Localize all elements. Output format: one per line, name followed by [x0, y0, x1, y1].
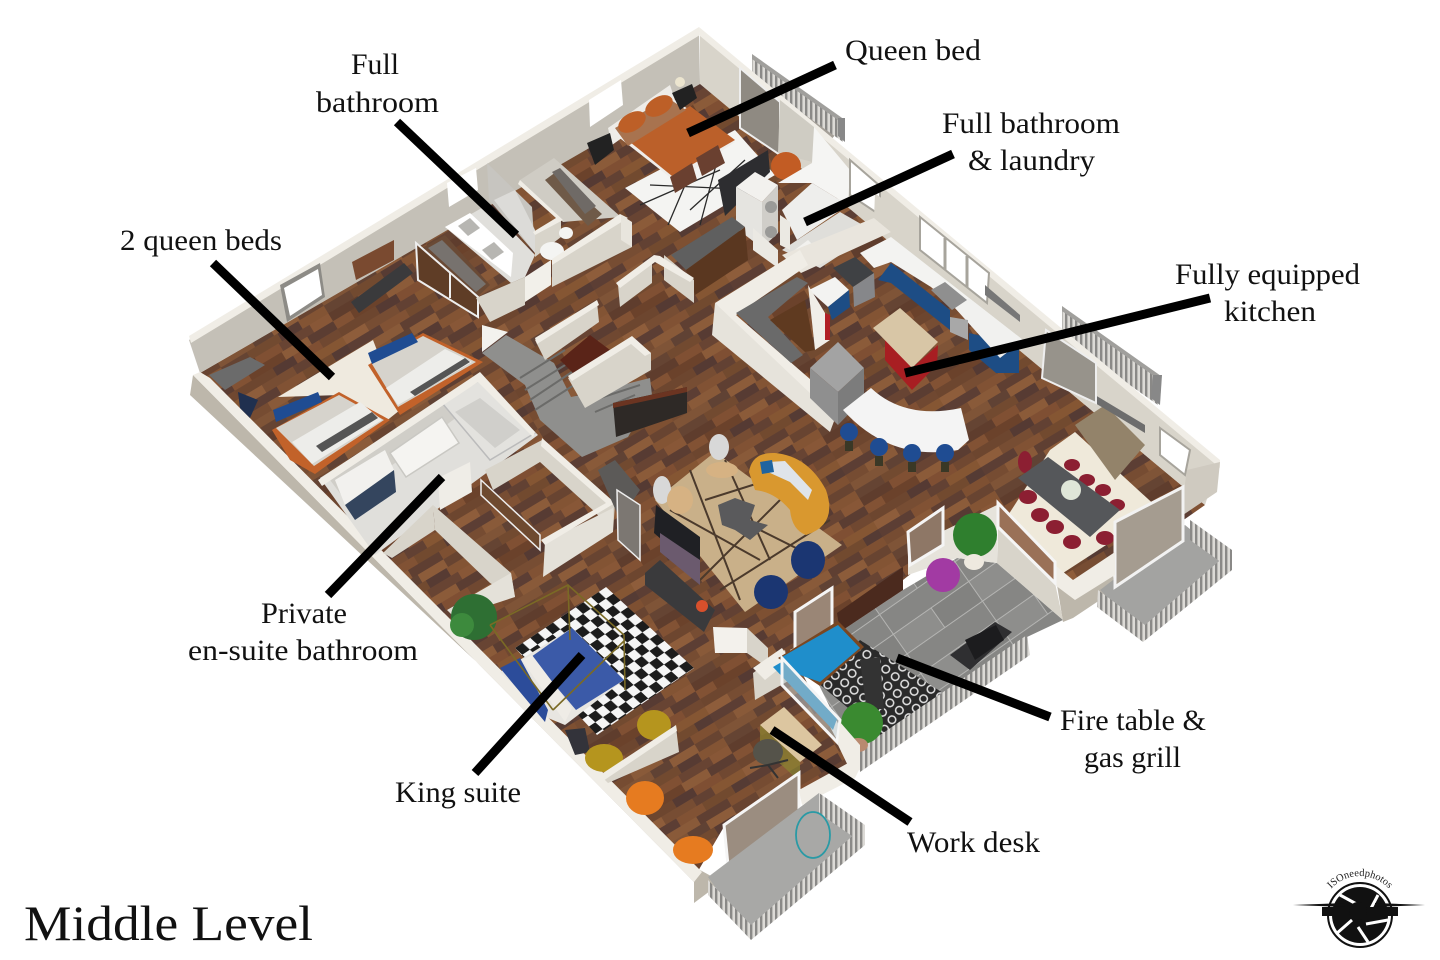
nightstand — [565, 728, 590, 755]
wall top — [782, 218, 891, 273]
closet: hall — [616, 217, 778, 307]
pantry wall — [712, 250, 840, 432]
slider: lower balcony — [724, 773, 799, 865]
door — [713, 627, 747, 653]
sofa frame — [778, 621, 864, 686]
bed A — [368, 333, 483, 415]
room: closets and full bathroom — [416, 158, 632, 322]
shower — [442, 380, 535, 460]
wall: rear left — [189, 27, 700, 373]
sofa cushions — [768, 461, 812, 500]
title: Middle Level — [24, 895, 313, 951]
label: king suite: King suite — [395, 776, 521, 809]
closet A doors — [481, 480, 540, 550]
fire table — [860, 657, 884, 710]
wall: corner stub — [1180, 462, 1220, 517]
room: queen bedroom — [587, 77, 775, 232]
stair railing — [613, 387, 687, 437]
door stub — [780, 215, 790, 250]
slider: queen bedroom — [740, 68, 780, 155]
wall face — [874, 193, 891, 232]
counter — [860, 237, 1023, 348]
shower walls — [778, 127, 850, 205]
wall: front left — [193, 372, 702, 882]
sink — [931, 282, 967, 310]
orange chairs — [626, 781, 713, 864]
label: en-suite bathroom: en-suite bathroom — [188, 634, 418, 667]
lower wall: dining — [1055, 552, 1115, 600]
canopy frame — [490, 585, 625, 710]
floor plan illustration — [189, 27, 1232, 940]
stove — [833, 257, 875, 307]
label: full bathroom and laundry: & laundry — [968, 144, 1095, 177]
closet right — [520, 158, 621, 226]
ottomans — [670, 163, 697, 193]
logo — [1294, 868, 1424, 948]
TV console — [645, 560, 715, 632]
glass: patio left — [908, 508, 943, 565]
shower pan — [455, 398, 520, 448]
label: kitchen: Fully equipped — [1175, 258, 1360, 291]
washer and dryer — [736, 172, 778, 248]
balcony: kitchen side — [1062, 306, 1162, 405]
closet A walls — [485, 440, 615, 532]
blue sofa — [780, 625, 860, 682]
work desk — [750, 707, 822, 782]
wall under dining glass — [997, 527, 1063, 620]
curved sofa — [749, 453, 829, 535]
bathroom door — [525, 260, 551, 302]
wall: bathroom front — [552, 214, 632, 287]
sideboard — [1075, 405, 1145, 480]
stub wall — [747, 628, 768, 668]
rug — [278, 340, 400, 422]
bed — [612, 95, 735, 182]
windows on rear wall — [280, 80, 623, 322]
nightstands — [587, 133, 614, 165]
bathtub — [390, 417, 459, 477]
coffee table — [718, 498, 768, 540]
centerpiece — [1061, 480, 1081, 500]
yellow chairs — [585, 710, 671, 772]
glass — [782, 658, 840, 742]
label: kitchen: kitchen — [1224, 295, 1316, 328]
shower — [487, 163, 535, 253]
partition wall — [778, 100, 816, 163]
room: dining — [1005, 330, 1190, 575]
armchair — [771, 152, 801, 180]
windows — [920, 217, 989, 303]
bed — [500, 628, 624, 725]
exterior base walls — [190, 375, 1115, 903]
wall: rear right — [699, 27, 1220, 505]
balcony: dining side — [1097, 520, 1232, 642]
rug — [625, 130, 775, 232]
closet B floor — [392, 530, 490, 613]
stone tiles — [818, 558, 1063, 762]
label: fire table and gas grill: Fire table & — [1060, 704, 1206, 737]
floor: hardwood — [200, 83, 1205, 878]
shower floor — [782, 183, 848, 240]
patio — [818, 505, 1063, 772]
blue armchairs — [754, 541, 825, 609]
rug lines — [640, 150, 760, 225]
back wall — [330, 378, 480, 500]
shelf — [985, 285, 1020, 322]
label: full bathroom: bathroom — [316, 86, 439, 119]
room: en-suite bathroom — [318, 372, 538, 555]
TV — [654, 505, 700, 573]
blue cabinets — [878, 263, 1019, 373]
glass: dining — [998, 503, 1055, 583]
rug lines — [670, 460, 830, 600]
marble floor — [782, 212, 875, 268]
wall — [318, 372, 535, 486]
label: 2 queen beds: 2 queen beds — [120, 224, 282, 257]
desk chair — [753, 739, 783, 765]
bar stools — [840, 423, 954, 472]
TV — [718, 150, 770, 216]
lamp — [675, 77, 685, 87]
vanity — [335, 450, 394, 505]
closet A floor — [495, 462, 595, 542]
counter right — [954, 298, 1023, 358]
white chairs — [653, 434, 738, 514]
slider: dining balcony — [1115, 487, 1183, 587]
label: work desk: Work desk — [907, 826, 1040, 859]
abstract rug — [655, 452, 842, 612]
room: king suite — [490, 585, 713, 864]
dining table — [1018, 457, 1120, 537]
label: queen bed: Queen bed — [845, 34, 981, 67]
shaft block — [598, 460, 640, 520]
checkered rug — [515, 587, 694, 735]
room: kitchen — [712, 193, 1023, 472]
toilet partition — [518, 180, 573, 260]
flowers — [696, 600, 708, 612]
left closet doors — [416, 243, 478, 317]
window — [850, 160, 880, 215]
closet B walls — [383, 505, 435, 558]
wall: lower right — [799, 762, 860, 805]
balcony: top rear — [745, 54, 845, 160]
marble floor — [320, 375, 538, 555]
headboard — [608, 85, 675, 145]
wall: closet front — [476, 277, 525, 322]
bathroom floor — [445, 205, 535, 283]
dishwasher — [950, 317, 968, 340]
bed B — [272, 392, 390, 474]
fire table rug — [818, 640, 943, 737]
patio wall — [908, 505, 997, 575]
room: walk-in closets — [383, 438, 640, 617]
wall TV — [352, 240, 394, 280]
island — [873, 308, 938, 390]
low wall — [602, 727, 679, 783]
pillows — [615, 107, 649, 137]
teal chair — [796, 812, 830, 858]
leader lines — [213, 65, 1210, 822]
balcony: lower — [708, 793, 865, 940]
plant: king suite — [450, 594, 497, 640]
media console — [351, 263, 413, 313]
plants and flowers — [841, 513, 997, 752]
door — [438, 462, 472, 510]
peninsula — [809, 277, 850, 320]
red chairs — [1018, 451, 1125, 549]
slider — [1042, 330, 1096, 403]
room: guest bedroom with 2 queen beds — [209, 240, 483, 474]
room: bathroom and laundry — [736, 100, 880, 268]
label: full bathroom: Full — [351, 48, 399, 81]
left closet clothes — [422, 235, 490, 298]
glass: patio entry — [795, 588, 832, 652]
window — [1160, 428, 1190, 475]
room: living area — [645, 434, 842, 668]
label: en-suite bathroom: Private — [261, 597, 347, 630]
desk — [209, 357, 265, 390]
sitting nook — [753, 621, 864, 770]
label: fire table and gas grill: gas grill — [1084, 741, 1181, 774]
gas grill — [950, 622, 1012, 670]
wall shelf — [1095, 395, 1145, 433]
label: full bathroom and laundry: Full bathroom — [942, 107, 1120, 140]
stairs — [482, 300, 687, 457]
sofa blue pillows — [760, 460, 774, 474]
rug — [1005, 432, 1160, 575]
vanity — [445, 213, 513, 277]
cabinet — [837, 567, 903, 632]
logo: ISOneedphotos — [1326, 868, 1392, 888]
desk chair — [238, 392, 258, 418]
railing — [858, 635, 1030, 772]
sink — [788, 240, 820, 266]
curved bar — [843, 388, 969, 452]
refrigerator — [810, 342, 864, 425]
